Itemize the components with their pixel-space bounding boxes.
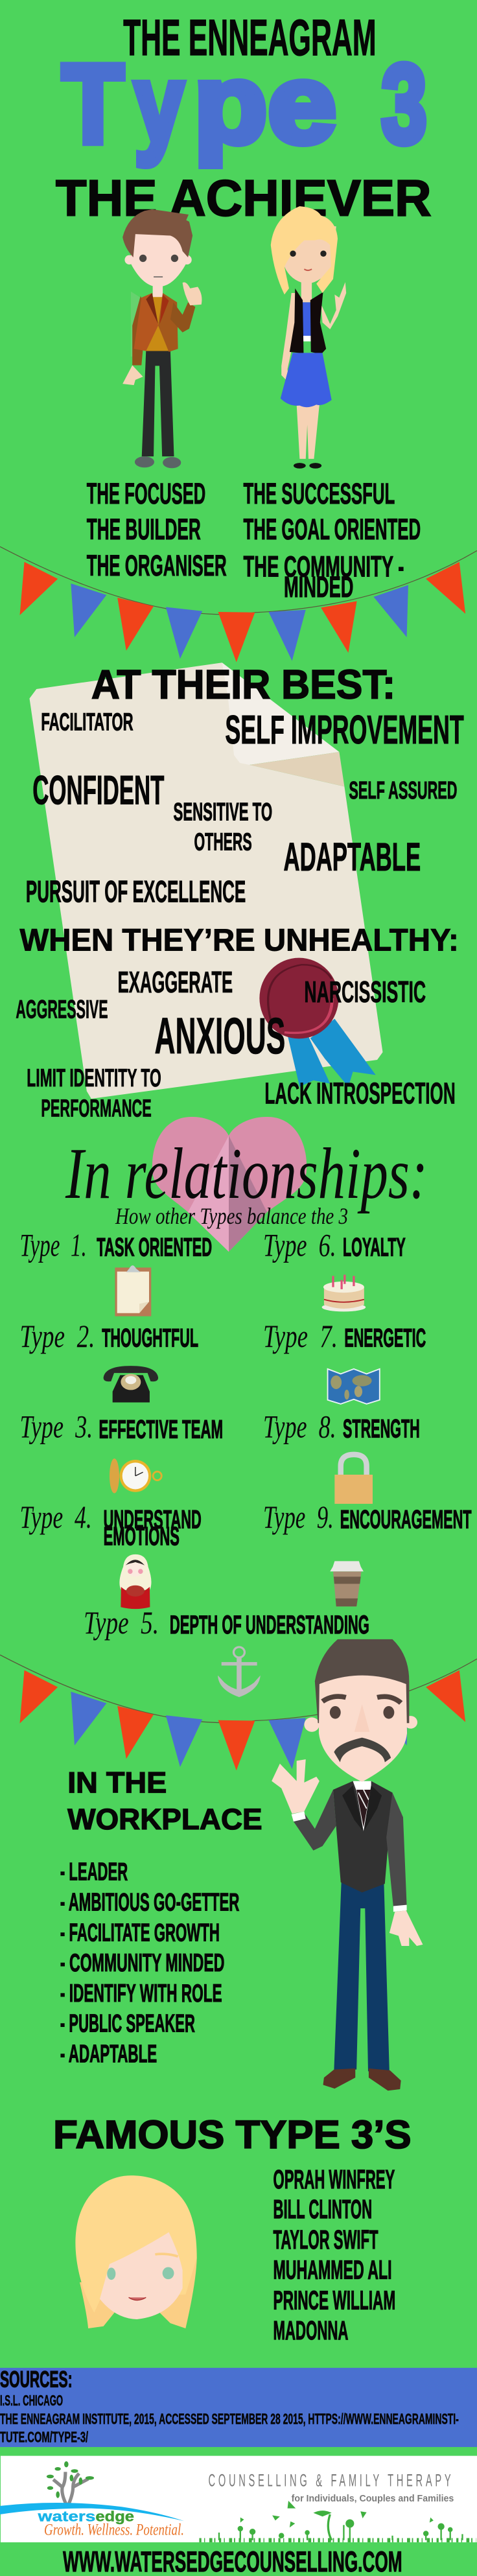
figure: man with moustache bbox=[272, 1639, 423, 2090]
list: workplace traits: - AMBITIOUS GO-GETTER bbox=[60, 1888, 239, 1916]
panel: sources bbox=[0, 2367, 477, 2447]
title: the achiever: THE ACHIEVER bbox=[56, 170, 432, 227]
word cloud: unhealthy traits bbox=[16, 965, 456, 1122]
list: workplace traits: - ADAPTABLE bbox=[60, 2040, 157, 2068]
word cloud: best traits: OTHERS bbox=[194, 828, 252, 856]
icon: cake bbox=[322, 1274, 366, 1311]
list: workplace traits: - IDENTIFY WITH ROLE bbox=[60, 1980, 222, 2008]
list: famous people bbox=[273, 2164, 395, 2345]
type 3: EFFECTIVE TEAM bbox=[99, 1415, 223, 1444]
logo: tree bbox=[47, 2461, 94, 2507]
bunting: top bbox=[0, 546, 477, 662]
list: famous people: MADONNA bbox=[273, 2315, 348, 2345]
word cloud: best traits: FACILITATOR bbox=[41, 708, 134, 736]
panel: traits bbox=[26, 478, 464, 909]
panel: sources: TUTE.COM/TYPE-3/ bbox=[0, 2429, 89, 2446]
type 7 bbox=[263, 1318, 426, 1354]
type 4: Type 4. bbox=[20, 1499, 92, 1535]
icon: padlock bbox=[334, 1455, 373, 1504]
word cloud: best traits: SENSITIVE TO bbox=[174, 797, 272, 826]
icon: coffee cup bbox=[330, 1561, 364, 1606]
type 3 bbox=[20, 1409, 223, 1445]
icon: ribbon bbox=[288, 1019, 376, 1087]
figure: man bbox=[122, 209, 202, 468]
type 8: Type 8. bbox=[263, 1409, 336, 1445]
logo: watersedge wordmark: waters bbox=[37, 2508, 95, 2524]
type 5: Type 5. bbox=[84, 1604, 159, 1641]
panel: footer banner bbox=[0, 2456, 477, 2542]
logo: water swoosh bbox=[0, 2503, 184, 2521]
list: workplace traits: - COMMUNITY MINDED bbox=[60, 1949, 224, 1977]
list: titles: THE BUILDER bbox=[87, 513, 201, 546]
logo: watersedge wordmark: edge bbox=[95, 2508, 134, 2524]
panel: at their best paper bbox=[30, 662, 382, 1099]
type 1: Type 1. bbox=[20, 1227, 87, 1263]
type 9 bbox=[263, 1499, 472, 1535]
list: famous people: BILL CLINTON bbox=[273, 2194, 372, 2224]
panel: famous and footer bbox=[0, 2113, 477, 2576]
type 2 bbox=[20, 1318, 198, 1354]
text: for individuals: for Individuals, Couples and Families bbox=[292, 2493, 454, 2504]
type 5 bbox=[84, 1604, 369, 1641]
heading: in the workplace: IN THE bbox=[67, 1766, 167, 1799]
title: type 3: 3 bbox=[382, 42, 427, 167]
figure: woman bbox=[271, 206, 346, 469]
panel: sources: SOURCES: bbox=[0, 2367, 73, 2392]
panel: workplace bbox=[60, 1639, 423, 2090]
type 2: THOUGHTFUL bbox=[102, 1324, 198, 1353]
word cloud: unhealthy traits: PERFORMANCE bbox=[41, 1094, 152, 1122]
heading: famous type 3s: FAMOUS TYPE 3’S bbox=[53, 2113, 412, 2157]
list: titles: THE FOCUSED bbox=[87, 478, 205, 510]
bunting: workplace bbox=[0, 1655, 477, 1770]
word cloud: best traits: CONFIDENT bbox=[32, 767, 164, 813]
type 2: Type 2. bbox=[20, 1318, 95, 1354]
icon: nesting doll bbox=[119, 1554, 151, 1609]
icon: anchor bbox=[218, 1647, 261, 1697]
icon: map bbox=[328, 1369, 380, 1404]
logo: watersedge wordmark bbox=[37, 2508, 134, 2524]
heading: in the workplace: WORKPLACE bbox=[67, 1803, 262, 1836]
icon: pocket watch bbox=[110, 1458, 161, 1493]
type 4: EMOTIONS bbox=[104, 1522, 180, 1551]
subheading: how other types balance: How other Types balance the 3 bbox=[115, 1203, 348, 1229]
type 8 bbox=[263, 1409, 420, 1445]
heading: at their best: AT THEIR BEST: bbox=[91, 662, 395, 708]
icon: blonde head bbox=[75, 2175, 197, 2328]
type 6: Type 6. bbox=[263, 1227, 336, 1263]
panel: sources: I.S.L. CHICAGO bbox=[0, 2392, 63, 2409]
list: workplace traits: - LEADER bbox=[60, 1858, 128, 1886]
word cloud: best traits bbox=[26, 707, 464, 909]
panel: title bbox=[56, 10, 432, 469]
list: workplace traits: - PUBLIC SPEAKER bbox=[60, 2010, 195, 2037]
icon: heart bbox=[152, 1117, 307, 1252]
list: titles bbox=[87, 478, 421, 604]
list: titles: MINDED bbox=[284, 571, 353, 604]
type 4: UNDERSTAND bbox=[104, 1505, 202, 1534]
title: type 3: e bbox=[268, 42, 336, 167]
type 3: Type 3. bbox=[20, 1409, 93, 1445]
heading: in the workplace bbox=[67, 1766, 262, 1836]
type 1: TASK ORIENTED bbox=[97, 1233, 212, 1262]
type 1 bbox=[20, 1227, 212, 1263]
panel: unhealthy bbox=[16, 922, 459, 1122]
type 6 bbox=[263, 1227, 406, 1263]
list: workplace traits: - FACILITATE GROWTH bbox=[60, 1919, 220, 1947]
title: type 3: p bbox=[194, 42, 267, 167]
word cloud: unhealthy traits: EXAGGERATE bbox=[118, 965, 233, 999]
type 7: Type 7. bbox=[263, 1318, 338, 1354]
list: famous people: TAYLOR SWIFT bbox=[273, 2225, 378, 2254]
title: type 3: T bbox=[62, 42, 124, 167]
icon: wax seal bbox=[259, 958, 338, 1038]
word cloud: best traits: PURSUIT OF EXCELLENCE bbox=[26, 875, 246, 909]
list: workplace traits bbox=[60, 1858, 239, 2068]
word cloud: unhealthy traits: ANXIOUS bbox=[154, 1008, 285, 1064]
type 6: LOYALTY bbox=[343, 1233, 406, 1262]
type 9: Type 9. bbox=[263, 1499, 334, 1535]
illustration: green plants bbox=[199, 2501, 476, 2540]
panel: types list bbox=[20, 1227, 472, 1641]
type 4 bbox=[20, 1499, 202, 1551]
icon: clipboard bbox=[115, 1265, 151, 1317]
word cloud: unhealthy traits: LIMIT IDENTITY TO bbox=[27, 1064, 161, 1092]
title: type 3: y bbox=[134, 42, 183, 167]
list: titles: THE ORGANISER bbox=[87, 550, 227, 582]
word cloud: unhealthy traits: AGGRESSIVE bbox=[16, 995, 108, 1024]
icon: telephone bbox=[104, 1366, 158, 1403]
list: famous people: MUHAMMED ALI bbox=[273, 2255, 392, 2285]
logo: tagline: Growth. Wellness. Potential. bbox=[44, 2520, 184, 2538]
